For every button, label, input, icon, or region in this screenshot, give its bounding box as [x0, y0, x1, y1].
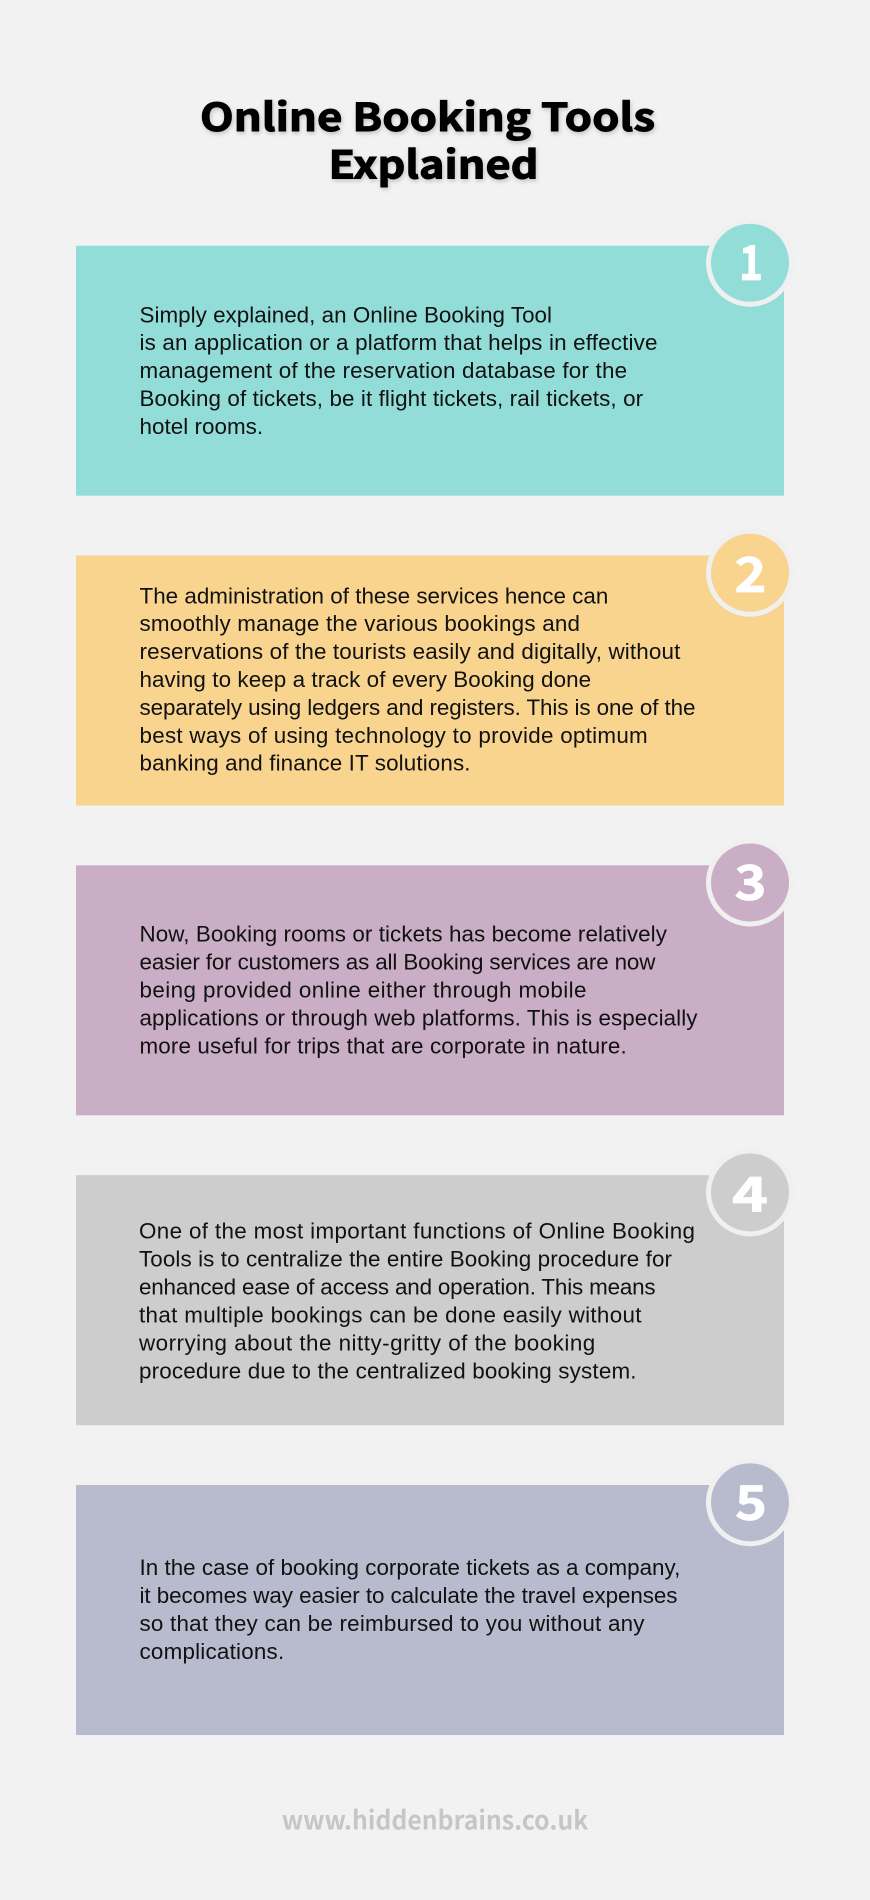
text block 3: Now, Booking rooms or tickets has become relatively [140, 922, 668, 947]
text block 2: best ways of using technology to provide optimum [140, 723, 648, 748]
panel 1 [76, 219, 794, 496]
text block 2: smoothly manage the various bookings and [140, 611, 580, 636]
text block 1 [140, 302, 658, 439]
badge 4 [706, 1148, 794, 1236]
text block 4: worrying about the nitty-gritty of the booking [138, 1330, 595, 1355]
panel 3 [76, 838, 794, 1115]
text block 5: so that they can be reimbursed to you without any [140, 1611, 645, 1636]
text block 5: In the case of booking corporate tickets as a company, [140, 1555, 680, 1580]
text block 5 [140, 1555, 680, 1664]
text block 4: enhanced ease of access and operation. This means [139, 1274, 656, 1299]
text block 3: being provided online either through mobile [140, 978, 586, 1002]
text block 2: reservations of the tourists easily and digitally, without [140, 639, 681, 664]
badge 4: 4 [732, 1156, 768, 1226]
badge 1 [706, 219, 794, 307]
badge 1: 1 [739, 224, 763, 294]
text block 2: separately using ledgers and registers. This is one of the [140, 695, 696, 720]
badge 3 [706, 838, 794, 926]
text block 2: banking and finance IT solutions. [140, 751, 470, 776]
text block 3: easier for customers as all Booking services are now [140, 950, 656, 975]
panel 5 [76, 1458, 794, 1735]
text block 2 [140, 583, 696, 776]
text block 4: Tools is to centralize the entire Booking procedure for [139, 1246, 673, 1271]
badge 5: 5 [735, 1464, 767, 1534]
text block 1: hotel rooms. [140, 414, 263, 439]
text block 5: complications. [140, 1639, 284, 1664]
badge 5 [706, 1458, 794, 1546]
text block 1: management of the reservation database for the [140, 358, 627, 383]
text block 2: having to keep a track of every Booking done [140, 667, 591, 692]
text block 1: is an application or a platform that helps in effective [140, 330, 658, 355]
panel 4 [76, 1148, 794, 1425]
badge 3: 3 [734, 844, 766, 914]
text block 4: One of the most important functions of Online Booking [139, 1218, 695, 1243]
title: Online Booking Tools [200, 87, 655, 143]
badge 2 [706, 529, 794, 617]
badge 2: 2 [734, 536, 766, 606]
text block 3: more useful for trips that are corporate in nature. [140, 1033, 627, 1058]
text block 1: Simply explained, an Online Booking Tool [140, 302, 552, 327]
text block 5: it becomes way easier to calculate the travel expenses [140, 1583, 678, 1608]
title [200, 87, 655, 190]
text block 2: The administration of these services hence can [140, 583, 608, 608]
text block 3: applications or through web platforms. This is especially [140, 1005, 698, 1030]
title: Explained [328, 134, 538, 190]
text block 3 [140, 922, 698, 1058]
text block 1: Booking of tickets, be it flight tickets, rail tickets, or [140, 386, 644, 411]
text block 4: that multiple bookings can be done easily without [139, 1302, 642, 1327]
text block 4 [138, 1218, 695, 1383]
panel 2 [76, 529, 794, 806]
text block 4: procedure due to the centralized booking system. [139, 1358, 636, 1383]
footer url: www.hiddenbrains.co.uk [282, 1800, 589, 1837]
